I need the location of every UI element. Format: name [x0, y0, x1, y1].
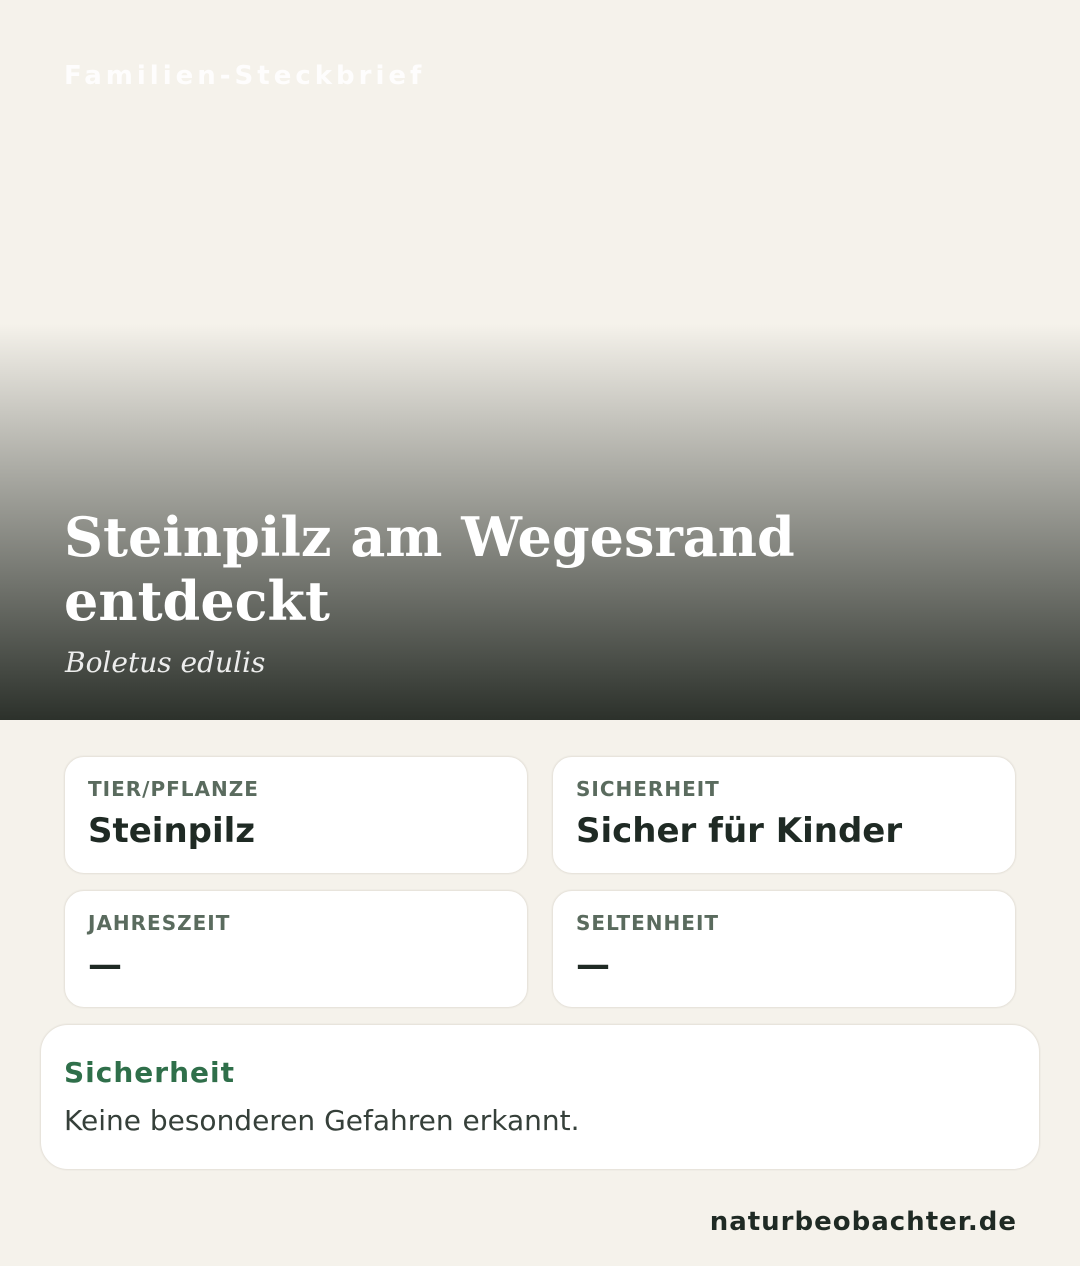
card: Sicherheit: [552, 756, 1016, 874]
panel: safety note: [40, 1024, 1040, 1170]
card value: —: [88, 945, 122, 985]
main title: Steinpilz am Wegesrand: [64, 505, 795, 569]
card: Jahreszeit: [64, 890, 528, 1008]
hero panel: [0, 0, 1080, 720]
card label: JAHRESZEIT: [88, 911, 230, 935]
scientific name: Boletus edulis: [65, 646, 265, 679]
card value: Steinpilz: [88, 811, 255, 851]
footer domain: naturbeobachter.de: [710, 1207, 1017, 1237]
main title: [64, 505, 795, 633]
card: Tier/Pflanze: [64, 756, 528, 874]
main title: entdeckt: [64, 569, 330, 633]
card label: TIER/PFLANZE: [88, 777, 259, 801]
safety heading: Sicherheit: [64, 1056, 235, 1089]
eyebrow label: Familien-Steckbrief: [64, 61, 425, 91]
card label: SELTENHEIT: [576, 911, 719, 935]
card value: Sicher für Kinder: [576, 811, 902, 851]
card value: —: [576, 945, 610, 985]
card label: SICHERHEIT: [576, 777, 720, 801]
card: Seltenheit: [552, 890, 1016, 1008]
safety text: Keine besonderen Gefahren erkannt.: [64, 1104, 580, 1137]
